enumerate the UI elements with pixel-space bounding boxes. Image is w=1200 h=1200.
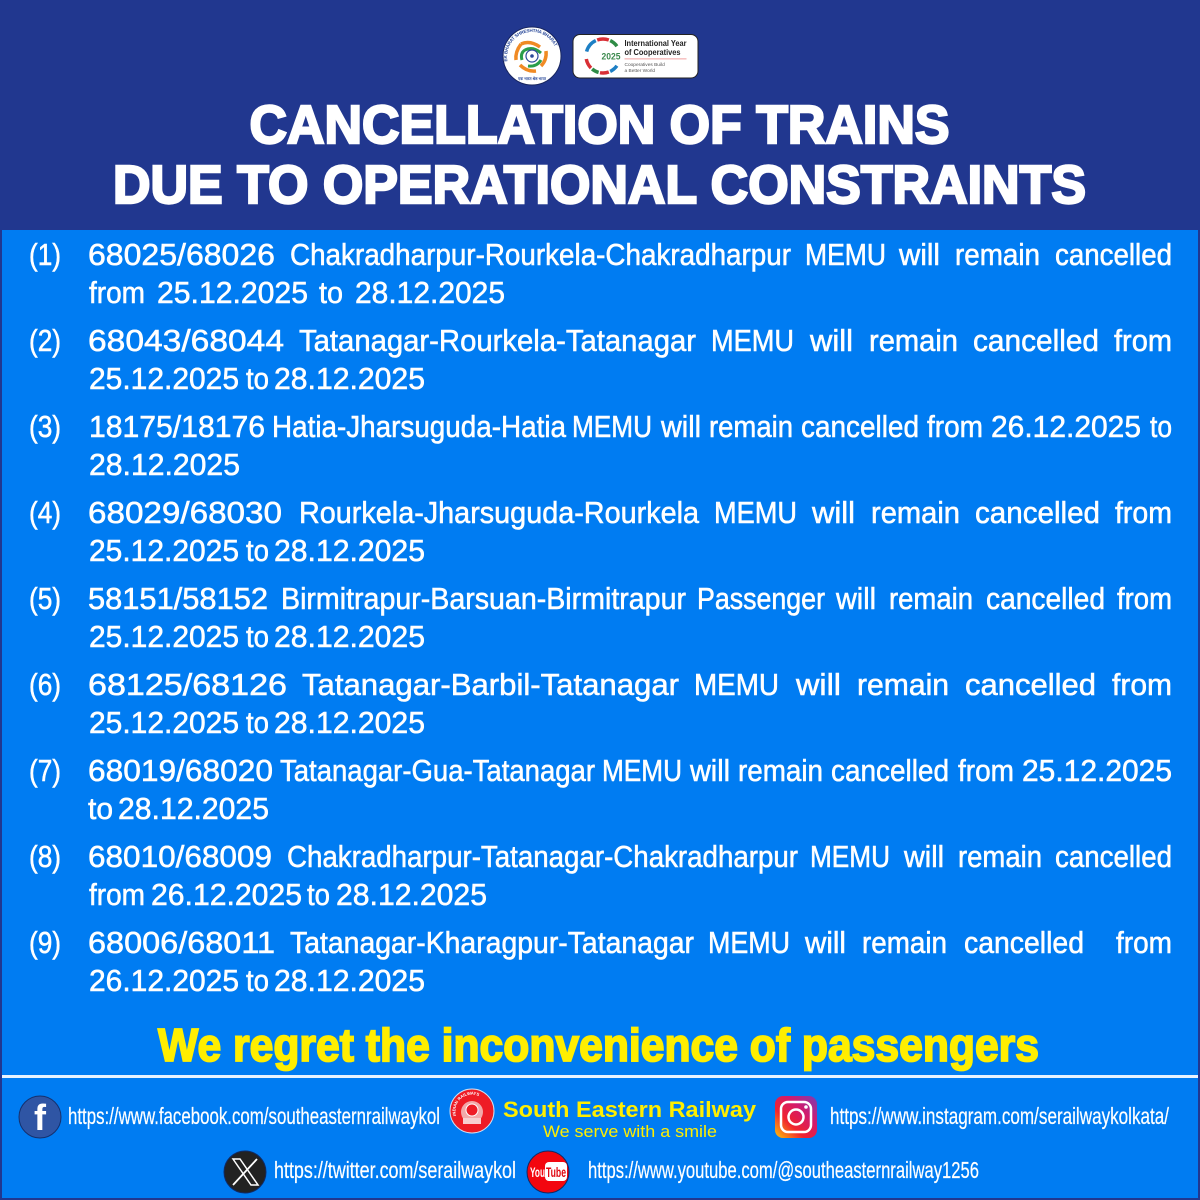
item 1: MEMU xyxy=(805,238,886,272)
item 3: 18175/18176 xyxy=(89,410,265,444)
item 1: to xyxy=(319,276,343,310)
item 5: remain xyxy=(889,582,973,616)
item 3: 26.12.2025 xyxy=(991,410,1141,444)
item 7: (7) xyxy=(29,754,61,788)
twitter url: https://twitter.com/serailwaykol xyxy=(274,1157,516,1183)
title xyxy=(113,95,1086,215)
item 8: (8) xyxy=(29,840,61,874)
item 1: cancelled xyxy=(1055,238,1172,272)
item 8: 26.12.2025 xyxy=(151,878,302,912)
logo: International Year of Cooperatives: Cooperatives Build xyxy=(624,62,665,68)
item 4: Rourkela-Jharsuguda-Rourkela xyxy=(299,496,699,530)
item 2: cancelled xyxy=(973,324,1099,358)
item 3: 28.12.2025 xyxy=(89,448,240,482)
item 8: to xyxy=(307,878,330,912)
item 1: (1) xyxy=(29,238,61,272)
item 7: 28.12.2025 xyxy=(118,792,269,826)
item 5: to xyxy=(246,620,269,654)
item 5: 28.12.2025 xyxy=(274,620,425,654)
item 5 xyxy=(29,582,1172,654)
item 2: 28.12.2025 xyxy=(274,362,425,396)
item 3: will xyxy=(660,410,701,444)
item 2: MEMU xyxy=(711,324,794,358)
youtube url: https://www.youtube.com/@southeasternrailway1256 xyxy=(588,1157,979,1183)
icon: X xyxy=(224,1151,266,1193)
item 6: 68125/68126 xyxy=(88,668,287,702)
logo: Ek Bharat Shreshtha Bharat xyxy=(502,26,562,86)
item 7: 25.12.2025 xyxy=(1022,754,1172,788)
logo: International Year of Cooperatives: 2025 xyxy=(602,52,621,62)
item 5: Birmitrapur-Barsuan-Birmitrapur xyxy=(281,582,686,616)
icon: South Eastern Railway emblem: INDIAN RAILWAYS xyxy=(452,1092,480,1116)
item 9: Tatanagar-Kharagpur-Tatanagar xyxy=(290,926,694,960)
icon: instagram xyxy=(775,1096,817,1138)
item 7 xyxy=(29,754,1172,826)
item 9 xyxy=(29,926,1172,998)
item 3: to xyxy=(1150,410,1172,444)
item 4: will xyxy=(811,496,855,530)
item 7: from xyxy=(958,754,1014,788)
item 4: cancelled xyxy=(975,496,1100,530)
brand name: South Eastern Railway xyxy=(503,1097,757,1122)
item 2: remain xyxy=(869,324,958,358)
item 2: from xyxy=(1114,324,1172,358)
item 6 xyxy=(29,668,1172,740)
item 6: from xyxy=(1112,668,1172,702)
item 4: (4) xyxy=(29,496,61,530)
item 9: 28.12.2025 xyxy=(274,964,425,998)
item 2: Tatanagar-Rourkela-Tatanagar xyxy=(299,324,696,358)
item 8: 28.12.2025 xyxy=(336,878,487,912)
item 4: 25.12.2025 xyxy=(89,534,239,568)
item 8: will xyxy=(903,840,944,874)
item 2: will xyxy=(809,324,853,358)
item 9: will xyxy=(804,926,846,960)
item 1: will xyxy=(898,238,940,272)
item 8: remain xyxy=(958,840,1042,874)
item 3: Hatia-Jharsuguda-Hatia xyxy=(272,410,566,444)
icon: facebook: f xyxy=(34,1097,47,1138)
item 5: Passenger xyxy=(697,582,825,616)
title: DUE TO OPERATIONAL CONSTRAINTS xyxy=(113,155,1086,215)
icon: youtube xyxy=(527,1151,569,1193)
header logos xyxy=(502,26,698,86)
icon: youtube: You xyxy=(530,1164,545,1180)
item 8 xyxy=(29,840,1172,912)
item 2: 68043/68044 xyxy=(88,324,284,358)
icon: South Eastern Railway emblem xyxy=(450,1088,494,1134)
facebook url: https://www.facebook.com/southeasternrailwaykol xyxy=(68,1103,440,1129)
item 3: MEMU xyxy=(572,410,652,444)
item 4: to xyxy=(246,534,269,568)
title: CANCELLATION OF TRAINS xyxy=(250,95,950,155)
item 7: will xyxy=(689,754,730,788)
icon: youtube: Tube xyxy=(546,1164,566,1180)
item 7: to xyxy=(88,792,113,826)
item 5: cancelled xyxy=(986,582,1105,616)
item 6: to xyxy=(246,706,269,740)
item 4: 28.12.2025 xyxy=(274,534,425,568)
item 2: 25.12.2025 xyxy=(89,362,239,396)
item 3 xyxy=(29,410,1172,482)
item 5: will xyxy=(835,582,876,616)
item 6: will xyxy=(795,668,841,702)
item 6: (6) xyxy=(29,668,61,702)
item 3: remain xyxy=(709,410,793,444)
item 2: to xyxy=(246,362,269,396)
logo: International Year of Cooperatives: of Cooperatives xyxy=(624,48,681,57)
item 1 xyxy=(29,238,1172,310)
item 8: cancelled xyxy=(1055,840,1172,874)
brand name xyxy=(503,1097,757,1141)
item 4: from xyxy=(1115,496,1172,530)
item 9: 26.12.2025 xyxy=(89,964,239,998)
item 9: 68006/68011 xyxy=(88,926,275,960)
logo: Ek Bharat Shreshtha Bharat: एक भारत श्रेष्ठ भारत xyxy=(517,76,547,81)
regret message: We regret the inconvenience of passengers xyxy=(158,1019,1039,1071)
item 1: 28.12.2025 xyxy=(355,276,505,310)
item 9: to xyxy=(246,964,269,998)
item 6: 28.12.2025 xyxy=(274,706,425,740)
item 4: remain xyxy=(871,496,960,530)
item 8: 68010/68009 xyxy=(88,840,272,874)
item 6: MEMU xyxy=(694,668,779,702)
item 4: MEMU xyxy=(714,496,797,530)
logo: International Year of Cooperatives: a Better World xyxy=(624,68,655,74)
item 2 xyxy=(29,324,1172,396)
item 3: (3) xyxy=(29,410,61,444)
item 6: remain xyxy=(857,668,949,702)
item 9: MEMU xyxy=(708,926,790,960)
item 8: from xyxy=(89,878,145,912)
logo: International Year of Cooperatives xyxy=(573,34,698,78)
item 5: from xyxy=(1117,582,1172,616)
item 2: (2) xyxy=(29,324,61,358)
item 7: 68019/68020 xyxy=(88,754,273,788)
item 9: (9) xyxy=(29,926,61,960)
item 1: 68025/68026 xyxy=(88,238,275,272)
icon: facebook xyxy=(19,1096,61,1138)
item 6: Tatanagar-Barbil-Tatanagar xyxy=(302,668,679,702)
item 6: 25.12.2025 xyxy=(89,706,239,740)
item 3: from xyxy=(927,410,983,444)
item 4: 68029/68030 xyxy=(88,496,282,530)
item 5: 25.12.2025 xyxy=(89,620,239,654)
item 5: (5) xyxy=(29,582,61,616)
item 7: Tatanagar-Gua-Tatanagar xyxy=(280,754,595,788)
item 1: remain xyxy=(955,238,1040,272)
item 9: cancelled xyxy=(964,926,1084,960)
item 9: remain xyxy=(862,926,947,960)
item 3: cancelled xyxy=(801,410,919,444)
brand name: We serve with a smile xyxy=(543,1122,717,1141)
item 1: from xyxy=(89,276,145,310)
logo: Ek Bharat Shreshtha Bharat: EK BHARAT SHRESHTHA BHARAT xyxy=(504,28,558,62)
item 7: remain xyxy=(738,754,823,788)
logo: International Year of Cooperatives: International Year xyxy=(624,39,686,48)
item 6: cancelled xyxy=(965,668,1096,702)
item 8: Chakradharpur-Tatanagar-Chakradharpur xyxy=(287,840,798,874)
item 7: MEMU xyxy=(602,754,682,788)
item 8: MEMU xyxy=(810,840,890,874)
item 1: 25.12.2025 xyxy=(157,276,308,310)
item 4 xyxy=(29,496,1172,568)
item 9: from xyxy=(1116,926,1172,960)
item 5: 58151/58152 xyxy=(88,582,268,616)
item 7: cancelled xyxy=(831,754,949,788)
item 1: Chakradharpur-Rourkela-Chakradharpur xyxy=(290,238,791,272)
